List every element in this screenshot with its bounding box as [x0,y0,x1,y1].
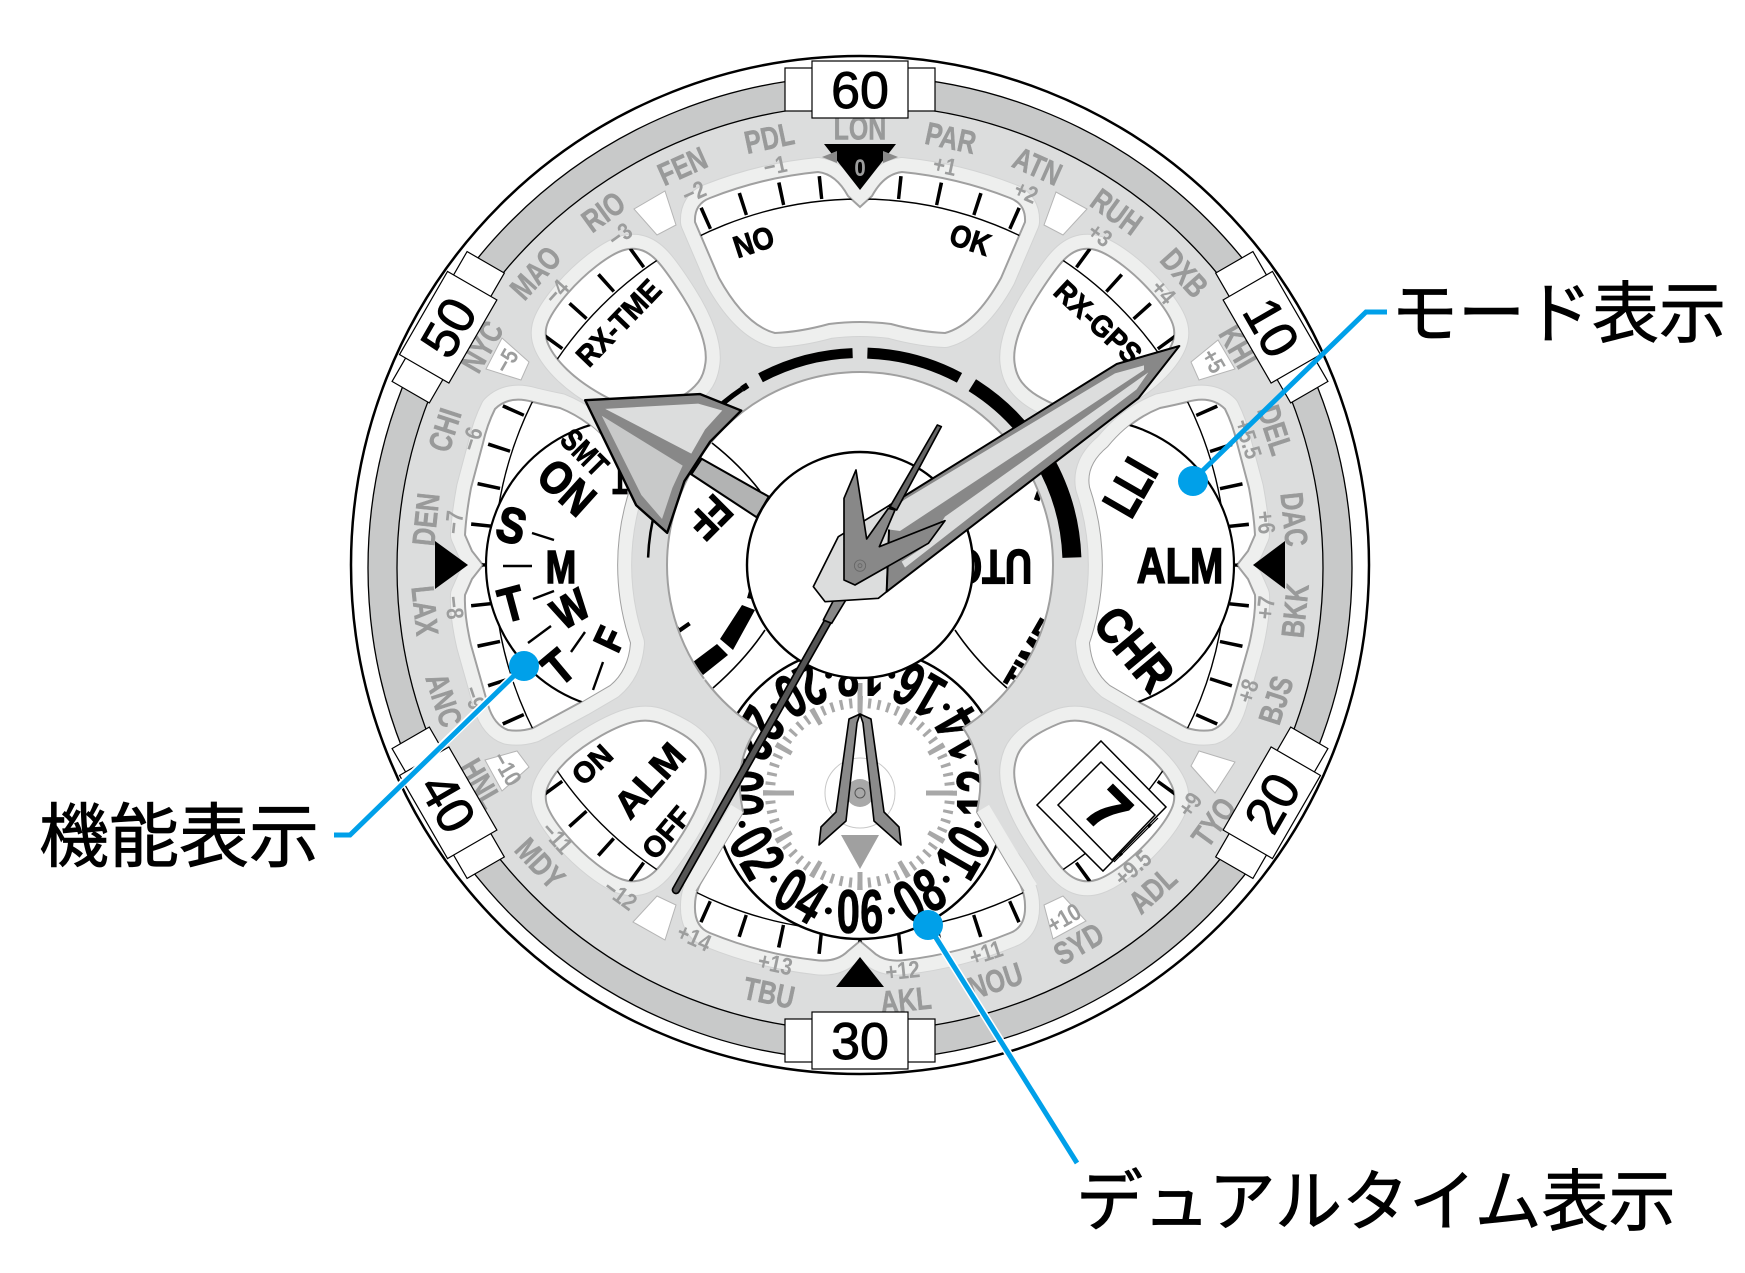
city codes: DEL [1250,401,1299,460]
centre ring tapered black arc [648,353,1072,558]
mode disc right [1089,424,1236,702]
city codes: TYO [1185,791,1244,854]
UTC offset numbers: +4 [1145,274,1181,310]
city codes: PDL [741,116,798,162]
lower left window ALM: OFF [636,801,698,866]
window light borders [465,172,1255,881]
label UTC: UTC [955,539,1032,592]
city codes: LAX [404,584,444,638]
upper right window RX-GPS: RX-GPS [1047,275,1148,372]
UTC offset numbers: +3 [1083,217,1117,253]
left day disc text: SMT [554,422,615,483]
watch dial [351,56,1369,1074]
sub-dial hour numerals [706,639,1014,947]
date window with 7 [1037,741,1166,871]
city codes: NOU [964,956,1027,1008]
sub-dial major ticks [772,705,948,881]
label: モード表示 [1391,277,1726,352]
label E: E [1024,474,1082,515]
city codes: MAO [504,240,569,307]
label L: L [661,603,695,641]
left day disc text: W [543,578,598,639]
UTC offset numbers: −2 [678,175,710,209]
callout: dual time display [913,910,1676,1240]
UTC offset numbers: −8 [440,595,469,621]
city codes: TBU [740,971,798,1017]
hub light piece [813,505,890,602]
lower left window ALM [566,735,698,866]
inner light dial plate [397,105,1323,1031]
city codes: ATN [1007,141,1067,193]
minute box 50 [386,248,512,407]
city codes: MDY [507,832,571,896]
sub-dial hour numerals: 04 [763,855,838,938]
sub-dial grey pointer [841,835,879,869]
sub-dial hour numerals: 22 [715,696,798,771]
dot [913,910,943,940]
date window with 7: 7 [1071,774,1144,847]
centre disc rotated labels [661,443,1094,701]
lower left window ALM: ALM [606,735,694,827]
ring ticks in windows [480,186,1240,944]
thin needle upper [890,425,941,510]
hour hand arrowhead and shaft [585,394,769,533]
city codes: NYC [454,315,511,379]
callout: mode display [1178,277,1726,496]
UTC offset numbers: +6 [1251,509,1280,535]
UTC offset numbers: −9 [458,682,491,713]
city codes: ANC [418,669,468,732]
UTC offset numbers: +5 [1196,344,1231,378]
city codes [404,112,1317,1021]
city codes: SYD [1048,916,1110,973]
UTC offset numbers: +1 [931,150,959,181]
UTC offset numbers: −1 [761,150,789,181]
long hand group [676,346,1179,890]
sub-dial hour numerals: 08 [882,855,957,938]
minute box 20 [1210,724,1336,883]
plate cusp covering sub-dial left [660,678,757,864]
centre disc edge over cusps [696,680,1024,891]
plate cusp covering sub-dial right [963,678,1060,864]
counter needle [676,622,828,890]
UTC offset numbers: −3 [603,217,637,253]
city codes: ADL [1122,860,1184,921]
minute box 50: 50 [410,288,489,368]
UTC offset numbers [440,150,1280,986]
sub-dial face [714,647,1006,939]
minute box 60: 60 [831,62,889,120]
central hub [747,452,973,678]
counter needle upper part [823,580,855,623]
UTC offset numbers: +5.5 [1229,416,1267,462]
label TIME: TIME [995,612,1073,701]
left day disc text: ON [527,449,605,527]
leader line [334,666,524,835]
UTC offset numbers: +9 [1172,787,1208,822]
centre disc [667,372,1053,758]
label: 機能表示 [39,798,319,876]
hour hand shaft [691,459,769,517]
UTC offset numbers: −4 [539,274,575,310]
UTC offset numbers: +13 [755,947,795,981]
left day disc text [491,422,634,696]
sub-dial hour numerals: 02 [715,815,798,890]
leader halo [928,925,1077,1163]
sub-dial hour numerals: 20 [763,648,838,731]
city codes: FEN [653,141,713,194]
label FF: FF [678,485,740,547]
bottom window light edges [689,808,1031,888]
minute hand upper stripe [873,365,1144,531]
outer case ring [351,56,1369,1074]
left day disc text: M [546,541,576,593]
sector dividers [712,443,1008,688]
UTC offset numbers: +9.5 [1109,845,1157,892]
city codes: RUH [1084,182,1148,243]
leader halo [350,666,524,834]
minute box 10: 10 [1231,288,1310,368]
leader line [928,925,1077,1163]
window white faces [465,172,1255,881]
UTC offset numbers: −6 [455,424,488,454]
left day disc text: T [493,576,531,634]
minute hand lower stripe [902,372,1148,568]
sub-dial hour numerals: 06 [837,878,883,947]
UTC offset numbers: +2 [1010,175,1042,209]
right mode text: LLI [1093,450,1169,526]
city codes: PAR [922,116,979,162]
city codes: LON [834,112,886,147]
dash separators [503,533,603,690]
leader line [1193,312,1387,480]
city codes: HNL [452,753,509,815]
UTC offset numbers: +7 [1251,595,1280,621]
top window text NO OK: NO [729,220,779,265]
city codes: AKL [878,981,933,1021]
index triangles [435,144,1285,987]
UTC offset numbers: −12 [598,874,642,916]
sub-dial hour numerals: 10 [922,815,1005,890]
UTC offset numbers: +12 [884,955,921,986]
city codes: CHI [422,404,469,456]
UTC offset numbers: −5 [489,344,524,378]
minute hand body [887,346,1179,592]
minute box 20: 20 [1234,764,1313,843]
sub-dial dots [738,671,982,915]
city codes: DXB [1153,242,1215,305]
right mode text: CHR [1083,596,1185,702]
hour hand head [585,394,741,533]
top window text NO OK [729,218,995,265]
minute box 10 [1208,248,1334,407]
left day disc text: T [532,640,585,696]
sword spike and barb [844,470,945,585]
minute box 40: 40 [407,764,486,843]
dot [509,651,539,681]
UTC offset numbers: −10 [486,747,527,791]
sub-dial hand blades [819,714,901,845]
city codes: DEN [406,491,447,548]
partial T beside the hour hand: T [613,460,627,501]
city codes: BJS [1253,672,1301,729]
sub-dial cardinal ticks [767,683,953,890]
UTC offset numbers: +8 [1232,676,1264,706]
right mode text: ALM [1137,538,1223,594]
grey bezel band [382,90,1338,1046]
right mode text [1083,450,1223,702]
minute box 30: 30 [831,1013,889,1071]
city codes: BKK [1275,582,1317,640]
minute box 40 [384,724,510,883]
city codes: RIO [576,185,632,240]
dual time sub-dial [706,639,1014,947]
lower left window ALM: ON [566,739,620,792]
sub-dial hour numerals: 16 [882,648,957,731]
sub-dial hour numerals: 18 [837,639,883,708]
bezel line outer [368,76,1352,1060]
sub-dial hour numerals: 14 [922,695,1005,771]
window border fringe [465,172,1255,881]
UTC offset numbers: −7 [440,509,469,535]
upper left window RX-TME: RX-TME [570,274,668,373]
city codes: KHI [1211,320,1263,375]
top window text NO OK: OK [945,218,995,263]
bottom window [680,848,1040,976]
callout: function display [39,651,539,876]
day disc left [484,424,630,702]
minute box 60 [785,61,935,120]
left day disc text: F [584,620,634,658]
dot [1178,466,1208,496]
UTC offset numbers: −11 [536,817,578,859]
city codes: DAC [1273,491,1314,548]
label: デュアルタイム表示 [1076,1165,1676,1240]
pivot mark [854,560,866,571]
sub-dial minor ticks [770,703,950,883]
label S: S [1036,504,1094,545]
thick black arc lower left [693,587,756,675]
sub-dial hour numerals: 00 [706,770,775,816]
minute box 30 [785,1012,935,1071]
UTC offset numbers: +10 [1042,898,1086,939]
sub-dial hand pivot [825,758,895,828]
UTC offset numbers: +14 [673,918,716,957]
white marker pads [485,191,1235,940]
UTC offset numbers: +11 [966,935,1006,971]
zero label: 0 [854,154,866,181]
small grey flanks [822,151,898,163]
sub-dial hour numerals: 12 [945,770,1014,816]
left day disc text: S [491,495,532,556]
